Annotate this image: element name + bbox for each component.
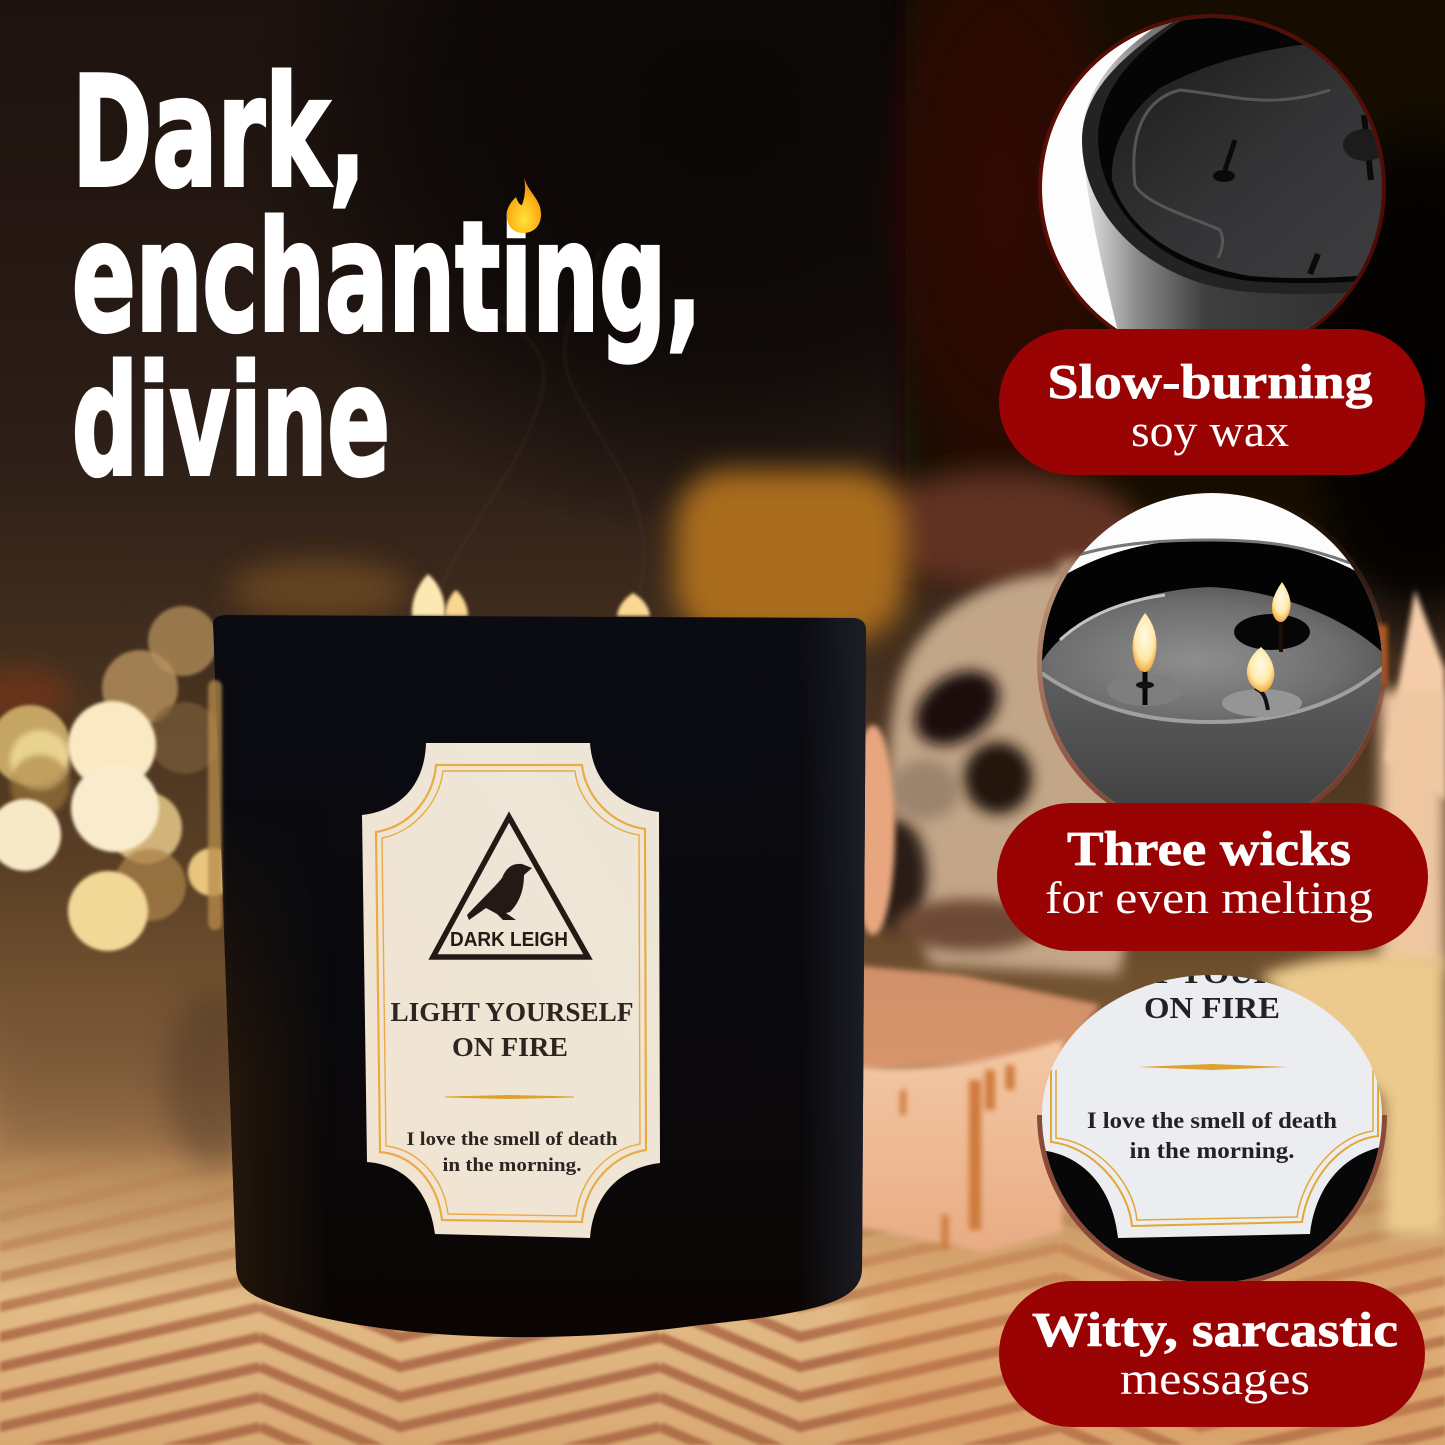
flames xyxy=(412,574,650,616)
pill: witty messages: Witty, sarcastic xyxy=(1032,1302,1398,1357)
label heading xyxy=(390,997,634,1062)
label message: I love the smell of death xyxy=(406,1129,618,1150)
pill: witty messages xyxy=(999,1281,1425,1427)
pill: slow-burning soy wax: soy wax xyxy=(1131,405,1289,456)
label message xyxy=(406,1129,618,1176)
photo circle: label message: in the morning. xyxy=(1130,1138,1294,1163)
photo circle: label message: LIGHT YOURSELF xyxy=(1062,955,1362,990)
pill: three wicks xyxy=(997,803,1428,951)
photo circle: three wicks xyxy=(1037,493,1387,803)
pill: three wicks: Three wicks xyxy=(1067,821,1351,876)
pill: three wicks: for even melting xyxy=(1045,872,1373,923)
blurred skull xyxy=(867,560,1130,975)
wood slab xyxy=(848,965,1100,1252)
candle label xyxy=(362,743,660,1238)
title xyxy=(72,44,702,510)
icon: raven triangle logo: DARK LEIGH xyxy=(450,929,568,951)
rug with chevron pattern xyxy=(0,990,1445,1445)
smoke wisps xyxy=(440,250,644,590)
blurred orange glow xyxy=(0,470,905,720)
pill: slow-burning soy wax xyxy=(999,329,1425,475)
title: enchanting, xyxy=(72,189,702,366)
title: Dark, xyxy=(72,44,366,221)
photo circle: label message: I love the smell of death xyxy=(1087,1108,1337,1133)
label heading: LIGHT YOURSELF xyxy=(390,997,634,1027)
title: divine xyxy=(72,333,390,510)
pill: slow-burning soy wax: Slow-burning xyxy=(1048,354,1373,409)
icon: raven triangle logo xyxy=(433,817,588,957)
label message: in the morning. xyxy=(442,1155,582,1176)
bokeh lights xyxy=(0,606,236,951)
photo circle: slow-burning wax xyxy=(1038,14,1386,329)
label heading: ON FIRE xyxy=(452,1032,568,1062)
candle jar xyxy=(208,574,870,1360)
candle glow shapes on right xyxy=(851,590,1445,1235)
pill: witty messages: messages xyxy=(1120,1353,1310,1404)
photo circle: label message: ON FIRE xyxy=(1144,990,1280,1025)
icon: flame over i xyxy=(507,178,541,233)
photo circle: label message xyxy=(1037,955,1387,1290)
